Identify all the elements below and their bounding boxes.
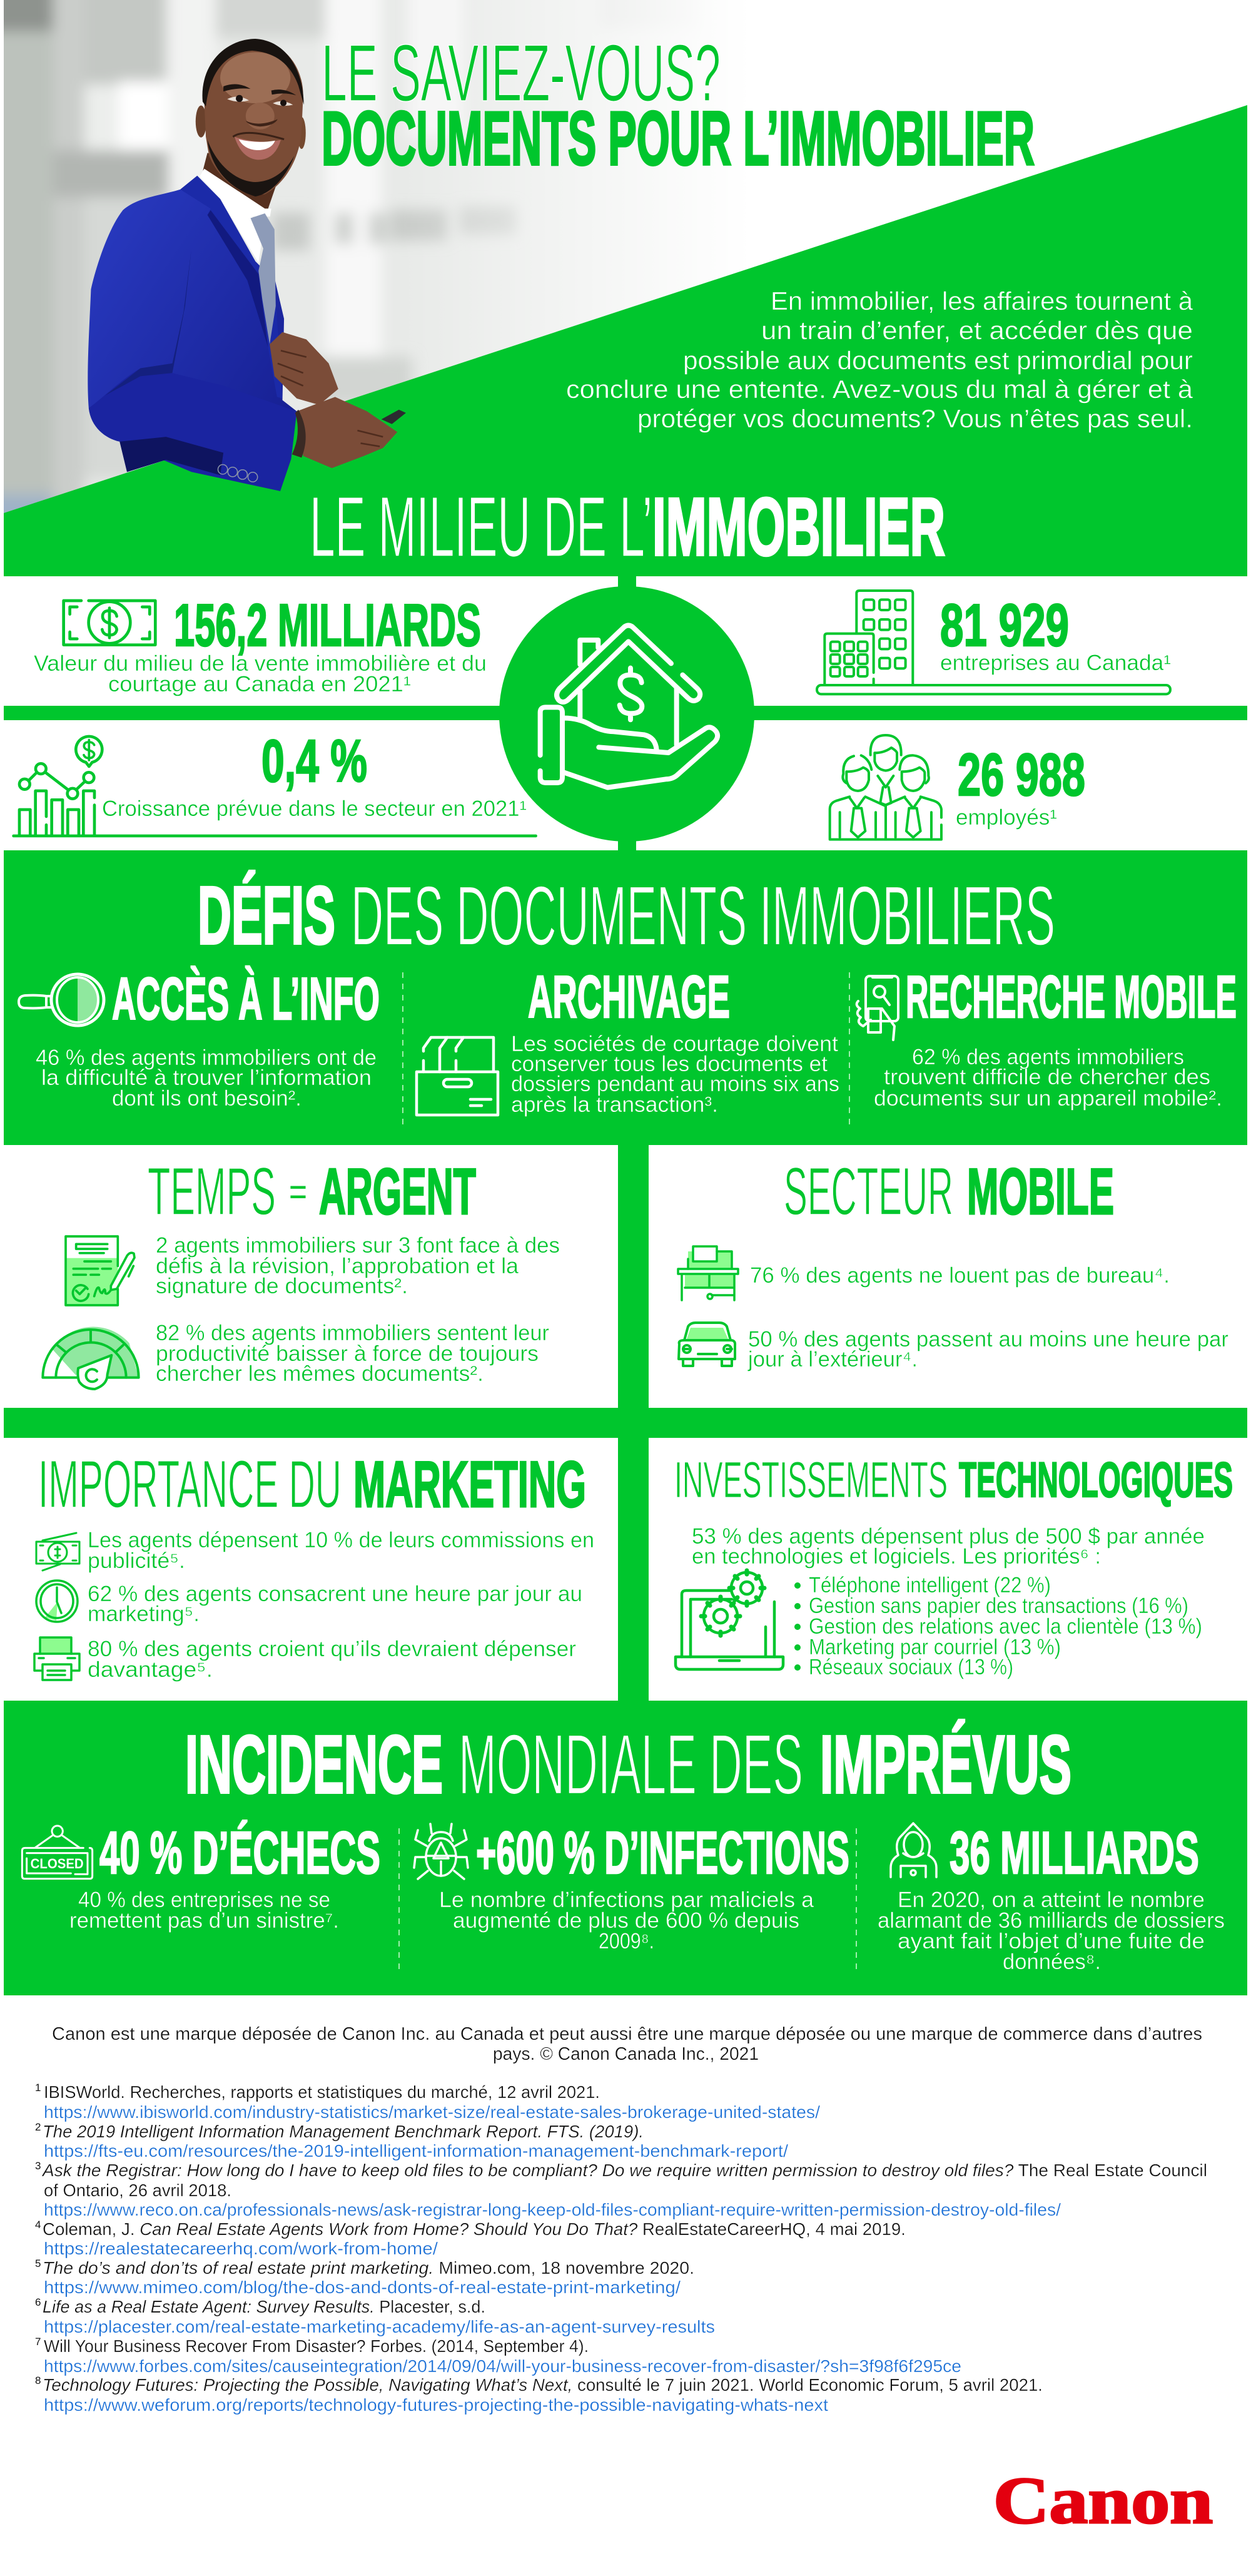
column: 36 milliards: ayant fait l’objet d’une fuite de [898,1929,1205,1953]
title [322,28,1035,181]
references list: https://www.ibisworld.com/industry-statistics/market-size/real-estate-sales-brokerage-united-states/ [44,2102,820,2122]
references list: 6 [35,2296,41,2308]
heading: incidence mondiale des imprévus [185,1717,1071,1813]
heading: temps = argent: = [289,1171,307,1213]
text: productivité [156,1321,549,1386]
references list: 2 [35,2121,41,2133]
text: productivité: chercher les mêmes documents². [156,1362,484,1386]
icon: hooded hacker [891,1823,936,1877]
intro text: En immobilier, les affaires tournent à [771,287,1193,315]
icon: buildings [817,591,1170,694]
intro text: un train d’enfer, et accéder dès que [761,316,1193,345]
panel: incidence columns [22,1820,1225,1974]
column: 36 milliards: données⁸. [1003,1950,1101,1974]
text: extérieur: jour à l’extérieur⁴. [747,1347,918,1372]
text: dépenser davantage: davantage⁵. [88,1657,213,1682]
heading: importance du marketing: IMPORTANCE DU [38,1446,342,1522]
stat: 26 988: employés¹ [956,805,1057,830]
references list: The 2019 Intelligent Information Management Benchmark Report. FTS. (2019). [43,2122,644,2141]
heading: secteur mobile: MOBILE [967,1156,1114,1228]
icon: phone search [857,976,898,1040]
list: priorités: Gestion des relations avec la clientèle (13 %) [809,1614,1202,1639]
references list: https://www.reco.on.ca/professionals-news/ask-registrar-long-keep-old-files-compliant-require-written-permission-destroy-old-files/ [44,2200,1061,2219]
text: heure par jour [88,1582,582,1626]
heading: importance du marketing: MARKETING [353,1448,586,1521]
icon: three employees [830,735,941,840]
column: +600 % d'infections [439,1820,849,1953]
stat: 0,4 %: Croissance prévue dans le secteur en 2021¹ [102,797,527,821]
icon: laptop with gears [676,1571,783,1669]
text: bureau: 76 % des agents ne louent pas de bureau⁴. [750,1263,1170,1288]
text: 53 %: 53 % des agents dépensent plus de 500 $ par année [692,1524,1205,1549]
icon: magnifier [19,974,104,1026]
text: commissions [88,1528,594,1573]
icon: clock [36,1581,78,1622]
references list: Life as a Real Estate Agent: Survey Results. Placester, s.d. [43,2297,485,2316]
column: archivage: conserver tous les documents et [511,1052,828,1076]
column: recherche mobile [874,964,1237,1111]
references list: https://www.weforum.org/reports/technology-futures-projecting-the-possible-navigating-whats-next [44,2395,828,2415]
references list: Ask the Registrar: How long do I have to keep old files to be compliant? Do we require written permission to destroy old files? The Real Estate Council [41,2161,1207,2180]
stat: 156,2 milliards: Valeur du milieu de la vente immobilière et du [34,651,487,676]
stat: 156,2 milliards [34,592,487,696]
references list: 3 [35,2160,41,2172]
stat: 156,2 milliards: 156,2 MILLIARDS [174,592,481,659]
column: +600 % d'infections: augmenté de plus de 600 % depuis [453,1908,799,1933]
icon: desk [678,1246,738,1300]
panel: temps = argent [4,1145,618,1408]
photo background: blurred city buildings [4,0,669,513]
heading: défis des documents immobiliers [198,868,1055,963]
stat: 0,4 % [102,728,527,821]
intro text: possible aux documents est primordial pour [683,346,1193,375]
panel: secteur mobile [649,1145,1247,1408]
references list: https://placester.com/real-estate-marketing-academy/life-as-an-agent-survey-results [44,2317,715,2336]
references list: 1 [35,2082,41,2094]
icon: printer [34,1637,79,1680]
icon: archive box [417,1037,498,1115]
column: archivage [511,964,839,1117]
heading: le milieu de l'immobilier: LE MILIEU DE L’ [310,479,652,575]
stat: 156,2 milliards: courtage au Canada en 2021¹ [108,672,411,696]
intro text: protéger vos documents? Vous n’êtes pas seul. [637,404,1193,433]
text: extérieur: 50 % des agents passent au moins une heure par [748,1327,1228,1352]
references list: 4 [35,2219,41,2231]
panel: défis columns [19,964,1237,1129]
column: 36 milliards: alarmant de 36 milliards de dossiers [878,1908,1225,1933]
trademark notice [52,2024,1202,2064]
icon: closed sign: CLOSED [31,1856,84,1871]
references list: https://fts-eu.com/resources/the-2019-intelligent-information-management-benchmark-report/ [44,2141,788,2161]
stat: 81 929 [940,592,1171,675]
text: productivité: productivité baisser à force de toujours [156,1341,539,1366]
references list: The do’s and don’ts of real estate print marketing. Mimeo.com, 18 novembre 2020. [43,2258,694,2278]
heading: secteur mobile: SECTEUR [784,1153,953,1229]
trademark notice: Canon est une marque déposée de Canon Inc. au Canada et peut aussi être une marque déposée ou une marque de commerce dans d’autres [52,2024,1202,2044]
references list: 5 [35,2258,41,2269]
column: +600 % d'infections: +600 % D’INFECTIONS [476,1820,849,1886]
column: 40 % d'échecs [69,1820,380,1933]
icon: growth chart [14,736,536,836]
list: priorités: Téléphone intelligent (22 %) [809,1573,1051,1597]
icon: car [679,1323,735,1366]
trademark notice: pays. © Canon Canada Inc., 2021 [493,2044,759,2064]
heading: incidence mondiale des imprévus: MONDIALE DES [458,1717,803,1813]
heading: temps = argent: ARGENT [319,1156,476,1228]
text: révision: signature de documents². [156,1274,408,1298]
title: LE SAVIEZ-VOUS? [322,28,721,118]
column: +600 % d'infections: 2009⁸. [599,1929,654,1953]
green diagonal banner [4,105,1247,576]
list: priorités: Réseaux sociaux (13 %) [809,1655,1013,1679]
heading: incidence mondiale des imprévus: INCIDENCE [185,1718,443,1810]
references list: Coleman, J. Can Real Estate Agents Work from Home? Should You Do That? RealEstateCareerHQ, 4 mai 2019. [43,2219,906,2239]
intro text: conclure une entente. Avez-vous du mal à gérer et à [566,375,1193,404]
panel: green sections background [4,850,1247,1995]
list: priorités: Gestion sans papier des transactions (16 %) [809,1594,1188,1618]
column: accès à l'info: dont ils ont besoin². [112,1086,301,1111]
text: dépenser davantage: 80 % des agents croient qu’ils devraient dépenser [88,1637,576,1661]
column: 40 % d'échecs: 40 % D’ÉCHECS [99,1820,380,1886]
references list [35,2082,1207,2415]
photo: smiling businessman in blue suit [88,39,406,491]
text: commissions: publicité⁵. [88,1549,185,1573]
icon: house on hand [540,625,717,788]
references list: 7 [35,2336,41,2348]
icon: banknote [64,601,155,645]
references list: Technology Futures: Projecting the Possible, Navigating What’s Next, consulté le 7 juin 2021. World Economic Forum, 5 avril 2021. [43,2375,1043,2395]
icon: small banknotes [36,1533,79,1571]
heading: le milieu de l'immobilier: IMMOBILIER [652,481,945,573]
stat: 81 929: entreprises au Canada¹ [940,651,1171,675]
text: heure par jour: 62 % des agents consacrent une heure par jour au [88,1582,582,1606]
column: 40 % d'échecs: 40 % des entreprises ne se [78,1888,330,1912]
references list: https://www.forbes.com/sites/causeintegration/2014/09/04/will-your-business-recover-from-disaster/?sh=3f98f6f295ce [44,2356,961,2376]
references list: of Ontario, 26 avril 2018. [44,2181,231,2200]
panel: importance du marketing [4,1438,618,1701]
column: recherche mobile: 62 % des agents immobiliers [912,1045,1184,1069]
heading: temps = argent: TEMPS [148,1153,276,1229]
text: révision: défis à la révision, l’approbation et la [156,1254,519,1278]
icon: signed contract [66,1236,134,1305]
column: 40 % d'échecs: remettent pas d’un sinistre⁷. [69,1908,339,1933]
text: révision [156,1233,560,1298]
references list: Will Your Business Recover From Disaster? Forbes. (2014, September 4). [44,2336,589,2356]
column: archivage: dossiers pendant au moins six ans [511,1072,839,1096]
heading: incidence mondiale des imprévus: IMPRÉVUS [820,1718,1071,1810]
stat: 26 988 [956,741,1085,830]
column: archivage: après la transaction³. [511,1092,718,1117]
icon: malware bug [414,1824,468,1879]
list: priorités: Marketing par courriel (13 %) [809,1635,1061,1659]
column: accès à l'info [36,965,380,1111]
heading: défis des documents immobiliers: DÉFIS [198,869,335,961]
stat: 81 929: 81 929 [940,592,1069,659]
column: 36 milliards: En 2020, on a atteint le nombre [898,1888,1205,1912]
text: heure par jour: marketing⁵. [88,1602,200,1626]
column: +600 % d'infections: Le nombre d’infections par maliciels a [439,1888,814,1912]
text: dépenser davantage [88,1637,576,1682]
references list: https://www.mimeo.com/blog/the-dos-and-donts-of-real-estate-print-marketing/ [44,2278,681,2297]
column: 36 milliards [878,1820,1225,1974]
intro text [566,287,1193,433]
icon: gauge [43,1327,139,1389]
references list: IBISWorld. Recherches, rapports et statistiques du marché, 12 avril 2021. [44,2082,600,2102]
text: révision: 2 agents immobiliers sur 3 font face à des [156,1233,560,1258]
column: recherche mobile: documents sur un appareil mobile². [874,1086,1222,1111]
panel: milieu stats [4,576,1247,850]
text: 53 % [692,1524,1205,1569]
icon: closed sign [22,1826,93,1879]
column: accès à l'info: ACCÈS À L’INFO [112,965,380,1032]
column: accès à l'info: 46 % des agents immobiliers ont de [36,1046,377,1070]
stat: 26 988: 26 988 [958,741,1085,808]
column: archivage: Les sociétés de courtage doivent [511,1032,838,1056]
list: priorités [794,1573,1202,1679]
stat: 0,4 %: 0,4 % [261,728,367,795]
column: accès à l'info: la difficulté à trouver l’information [41,1066,372,1090]
column: recherche mobile: trouvent difficile de chercher des [884,1065,1210,1089]
references list: 8 [35,2375,41,2386]
heading: investissements technologiques: INVESTISSEMENTS [674,1452,948,1509]
text: 53 %: en technologies et logiciels. Les priorités⁶ : [692,1544,1101,1569]
text: productivité: 82 % des agents immobiliers sentent leur [156,1321,549,1345]
panel: investissements technologiques [649,1438,1247,1701]
logo: Canon: Canon [993,2464,1213,2537]
column: archivage: ARCHIVAGE [528,964,730,1031]
references list: https://realestatecareerhq.com/work-from-home/ [44,2239,438,2258]
text: extérieur [747,1327,1228,1372]
text: commissions: Les agents dépensent 10 % de leurs commissions en [88,1528,594,1552]
